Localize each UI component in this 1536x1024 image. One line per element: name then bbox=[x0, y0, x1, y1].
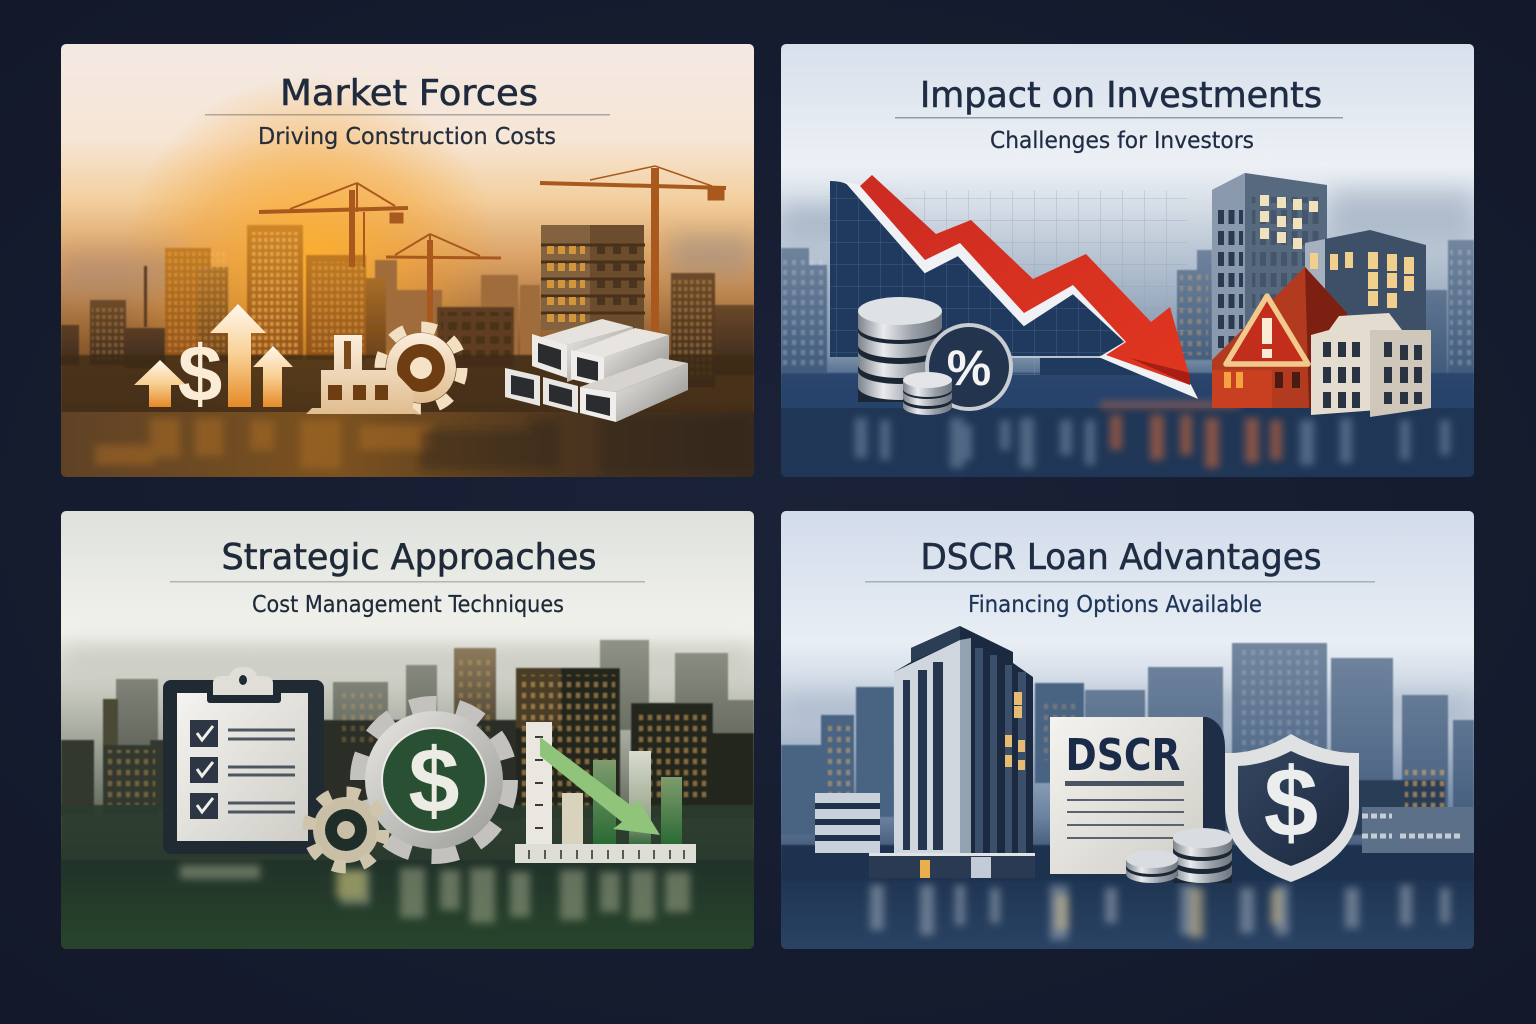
skyline: blue city bbox=[781, 240, 1474, 375]
water reflection bbox=[180, 865, 690, 923]
icon: coin stacks bbox=[1126, 828, 1232, 883]
dark waterfront band bbox=[61, 804, 754, 853]
heading: Impact on Investments: Impact on Investments bbox=[920, 75, 1322, 116]
panel: DSCR Loan Advantages bbox=[781, 511, 1474, 949]
document: DSCR bbox=[1050, 717, 1225, 874]
heading: Strategic Approaches: Cost Management Techniques bbox=[252, 592, 564, 618]
icon: clipboard checklist bbox=[163, 667, 324, 854]
icon: coin stack and percent badge: % bbox=[947, 340, 991, 396]
heading: DSCR Loan Advantages bbox=[865, 537, 1375, 618]
icon: steel beams bbox=[505, 319, 688, 422]
water reflection bbox=[855, 402, 1450, 468]
icon: coin stack and percent badge bbox=[858, 297, 1011, 415]
heading: Market Forces bbox=[205, 73, 610, 150]
icon: warning triangle bbox=[1226, 296, 1308, 364]
tower cranes bbox=[259, 166, 726, 333]
heading: Impact on Investments: Challenges for Investors bbox=[990, 128, 1254, 154]
skyline: muted city bbox=[61, 640, 754, 820]
heading: Impact on Investments bbox=[895, 75, 1343, 154]
water reflection bbox=[61, 412, 754, 477]
buildings: investment towers bbox=[1212, 173, 1431, 417]
chart: declining area with grid bbox=[830, 181, 1187, 375]
water reflection bbox=[870, 885, 1450, 940]
low building right bbox=[1362, 807, 1474, 853]
skyline: blue city bbox=[781, 643, 1474, 837]
lower haze and water bbox=[781, 373, 1474, 411]
icon: shield with dollar bbox=[1225, 734, 1359, 882]
arrow: falling red trend bbox=[847, 175, 1196, 397]
office tower bbox=[869, 626, 1035, 878]
panel: Strategic Approaches bbox=[61, 511, 754, 949]
icon: big gear with dollar bbox=[359, 705, 509, 855]
document: DSCR: DSCR bbox=[1066, 730, 1180, 781]
icon: shield with dollar: $ bbox=[1264, 747, 1318, 857]
heading: DSCR Loan Advantages: DSCR Loan Advantages bbox=[920, 537, 1322, 578]
heading: Strategic Approaches bbox=[170, 537, 645, 618]
chart: descending bars with green arrow bbox=[515, 722, 696, 863]
icon: factory and gear bbox=[306, 327, 462, 414]
building under construction bbox=[541, 225, 645, 330]
ground band bbox=[61, 355, 754, 417]
panel: Impact on Investments bbox=[781, 44, 1474, 477]
low building left bbox=[815, 793, 880, 853]
icon: small gear bbox=[309, 793, 383, 867]
skyline: sunset city bbox=[61, 225, 754, 387]
panel: Market Forces bbox=[61, 44, 754, 477]
icon: big gear with dollar: $ bbox=[408, 730, 460, 832]
heading: DSCR Loan Advantages: Financing Options Available bbox=[968, 592, 1262, 618]
heading: Market Forces: Driving Construction Costs bbox=[258, 124, 556, 150]
dark waterfront band bbox=[781, 844, 1474, 875]
heading: Strategic Approaches: Strategic Approaches bbox=[222, 537, 596, 578]
heading: Market Forces: Market Forces bbox=[280, 73, 538, 114]
icon: rising arrows with dollar bbox=[134, 304, 293, 418]
icon: rising arrows with dollar: $ bbox=[178, 329, 222, 418]
